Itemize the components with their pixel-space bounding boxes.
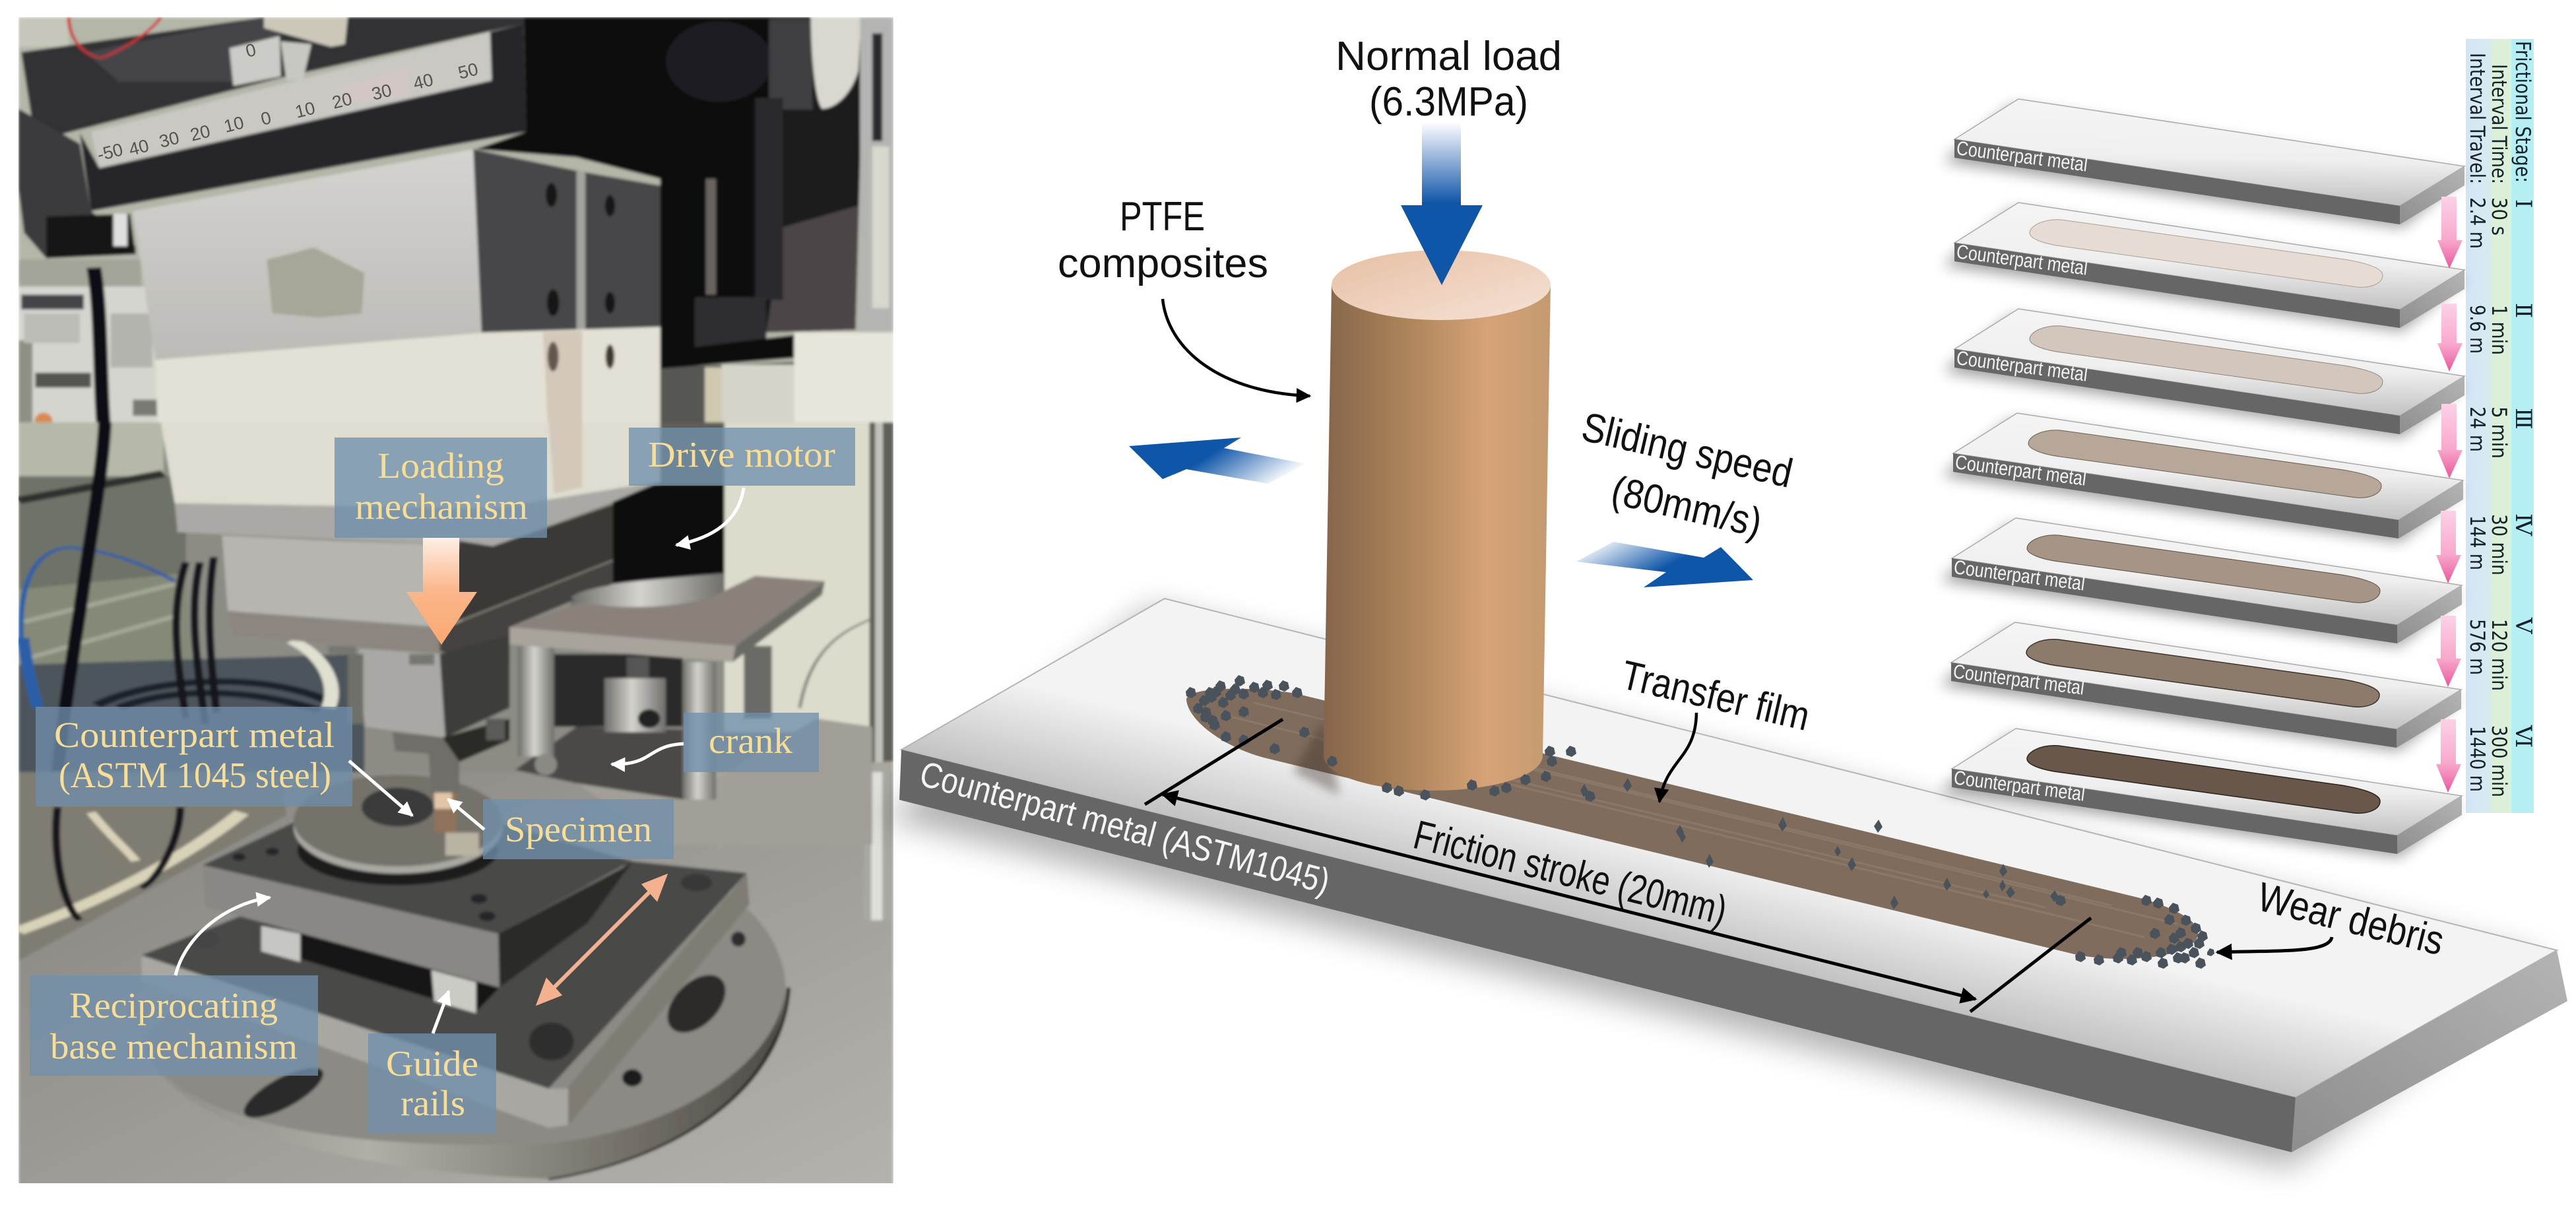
row: interval travel: 24 m bbox=[2465, 407, 2489, 452]
arrow: friction stroke dimension bbox=[1145, 719, 2091, 1012]
scale numerals: 40 bbox=[127, 135, 151, 160]
upper rig bbox=[18, 17, 893, 440]
row: interval travel: 144 m bbox=[2465, 515, 2489, 570]
heading: normal load: (6.3MPa) bbox=[1369, 79, 1528, 125]
row: interval time bbox=[2487, 64, 2511, 797]
row: interval time: 5 min bbox=[2487, 407, 2511, 459]
slab: stage III: Counterpart metal bbox=[1955, 347, 2089, 386]
row: frictional stage: Ⅵ bbox=[2511, 725, 2535, 748]
scale numerals: 40 bbox=[411, 69, 435, 94]
debris in front of pin bbox=[1327, 746, 1557, 800]
slab: stage V bbox=[1941, 518, 2462, 647]
callout: loading mechanism bbox=[335, 438, 547, 538]
scale numerals: 50 bbox=[456, 59, 480, 83]
central rig bbox=[161, 422, 872, 845]
transfer film bbox=[1186, 689, 2198, 959]
row: frictional stage: Ⅳ bbox=[2511, 513, 2535, 537]
slab label: Counterpart metal (ASTM1045) bbox=[916, 754, 1334, 901]
scale numerals: 10 bbox=[293, 98, 317, 122]
heading: normal load: Normal load bbox=[1336, 34, 1562, 79]
scale numerals: 30 bbox=[157, 127, 181, 152]
slab: stage V: Counterpart metal bbox=[1952, 556, 2086, 595]
slab: stage VII bbox=[1941, 729, 2462, 857]
callout: reciprocating base mechanism: Reciprocating bbox=[69, 985, 278, 1026]
arrows: stage progression bbox=[2436, 197, 2463, 793]
row: frictional stage: Ⅲ bbox=[2511, 408, 2535, 430]
cylinder: PTFE composite pin bbox=[1324, 250, 1551, 791]
row: interval travel bbox=[2465, 53, 2489, 792]
slab: stage VI bbox=[1940, 622, 2461, 751]
slab: stage I: Counterpart metal bbox=[1955, 137, 2089, 176]
wear debris particles bbox=[1186, 675, 2214, 969]
row: frictional stage: Ⅰ bbox=[2511, 199, 2535, 208]
label: PTFE composites bbox=[1058, 194, 1268, 286]
scale numerals: 0 bbox=[243, 40, 258, 61]
callout: loading mechanism: mechanism bbox=[355, 486, 528, 527]
row: interval travel: 2.4 m bbox=[2465, 197, 2489, 249]
scale numerals: 0 bbox=[259, 108, 273, 129]
row: interval time: 30 s bbox=[2487, 197, 2511, 236]
panel: frictional stage table bbox=[2465, 39, 2535, 813]
row: interval time: 30 min bbox=[2487, 514, 2511, 575]
row: interval time: 120 min bbox=[2487, 619, 2511, 691]
main slab shadow bbox=[884, 607, 2547, 1168]
slab: stage I bbox=[1943, 99, 2464, 228]
callout: loading mechanism: Loading bbox=[377, 445, 504, 486]
label: wear debris: Wear debris bbox=[2253, 874, 2449, 964]
slab: stage IV bbox=[1942, 413, 2463, 542]
callout: counterpart metal: Counterpart metal bbox=[54, 715, 335, 755]
callout: reciprocating base mechanism bbox=[30, 975, 318, 1076]
callout: counterpart metal: (ASTM 1045 steel) bbox=[59, 755, 331, 795]
callout: guide rails: Guide bbox=[386, 1043, 478, 1084]
label: sliding speed bbox=[1578, 404, 1797, 546]
arrow: normal load bbox=[1401, 122, 1483, 285]
lower background bbox=[18, 418, 893, 773]
row: frictional stage: Ⅴ bbox=[2511, 617, 2535, 635]
callout: drive motor: Drive motor bbox=[648, 434, 835, 474]
label: PTFE composites: composites bbox=[1058, 241, 1268, 286]
scale numerals: 20 bbox=[188, 121, 212, 145]
row: interval time: Interval Time: bbox=[2487, 64, 2511, 184]
row: interval travel: 1440 m bbox=[2465, 726, 2489, 792]
row: frictional stage: Frictional Stage: bbox=[2511, 41, 2534, 183]
arrow: wear debris pointer bbox=[2217, 937, 2332, 952]
slab: stage VI: Counterpart metal bbox=[1952, 661, 2086, 700]
slab: stage III bbox=[1943, 309, 2464, 438]
label: PTFE composites: PTFE bbox=[1120, 194, 1205, 240]
callout: guide rails: rails bbox=[401, 1083, 465, 1123]
arrow: sliding right bbox=[1576, 542, 1753, 587]
callout: counterpart metal bbox=[36, 707, 352, 806]
row: interval time: 1 min bbox=[2487, 305, 2511, 355]
callout: specimen bbox=[483, 799, 674, 859]
slab: stage II: Counterpart metal bbox=[1955, 241, 2089, 280]
scale numerals bbox=[95, 40, 480, 165]
heading: normal load bbox=[1336, 34, 1562, 125]
label: friction stroke: Friction stroke (20mm) bbox=[1409, 812, 1731, 934]
label: sliding speed: (80mm/s) bbox=[1607, 467, 1766, 546]
label: transfer film: Transfer film bbox=[1617, 652, 1814, 740]
arrows: white photo leader lines bbox=[176, 488, 744, 1033]
slab: stage VII: Counterpart metal bbox=[1952, 767, 2086, 806]
scale numerals: 30 bbox=[370, 80, 394, 104]
row: interval travel: 9.6 m bbox=[2465, 305, 2489, 354]
callout: guide rails bbox=[368, 1033, 496, 1133]
callout: crank: crank bbox=[709, 721, 793, 761]
panel: main schematic bbox=[884, 34, 2567, 1168]
callout: specimen: Specimen bbox=[505, 809, 652, 849]
arrow: sliding left bbox=[1129, 438, 1306, 484]
scale numerals: 10 bbox=[222, 112, 246, 137]
arrow: transfer film pointer bbox=[1659, 713, 1696, 802]
arrow: PTFE pointer bbox=[1163, 299, 1310, 396]
scale numerals: 20 bbox=[330, 88, 354, 113]
row: interval travel: 576 m bbox=[2465, 619, 2489, 675]
row: interval time: 300 min bbox=[2487, 725, 2511, 797]
callout: drive motor bbox=[629, 428, 855, 486]
scale numerals: -50 bbox=[95, 139, 125, 165]
main slab: counterpart metal bbox=[899, 599, 2567, 1152]
row: interval travel: Interval Travel: bbox=[2465, 53, 2489, 184]
callout: reciprocating base mechanism: base mechanism bbox=[50, 1026, 298, 1066]
panel: photo of test rig bbox=[18, 17, 893, 1194]
arrow: loading direction bbox=[406, 538, 477, 645]
callout: crank bbox=[684, 713, 819, 772]
label: sliding speed: Sliding speed bbox=[1578, 404, 1797, 497]
row: frictional stage: Ⅱ bbox=[2511, 303, 2535, 318]
arrow: reciprocating direction bbox=[539, 877, 664, 1002]
slab: stage II bbox=[1943, 203, 2464, 331]
slab: stage IV: Counterpart metal bbox=[1954, 451, 2088, 490]
row: frictional stage bbox=[2511, 41, 2535, 748]
base and bench bbox=[18, 762, 893, 1194]
photo: rig machinery bbox=[18, 17, 893, 1194]
